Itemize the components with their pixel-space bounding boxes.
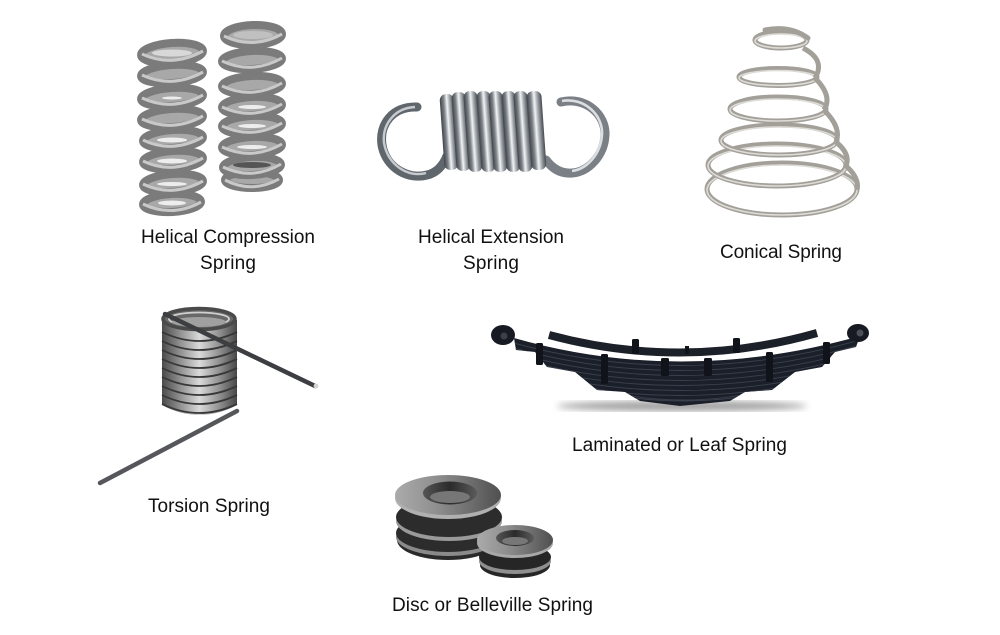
label: helical compression spring bbox=[141, 227, 315, 274]
label: helical extension spring: Helical Extension bbox=[418, 227, 564, 248]
left compression spring bbox=[140, 41, 204, 214]
right hook bbox=[546, 101, 605, 173]
label: helical compression spring: Helical Compression bbox=[141, 227, 315, 248]
label: helical extension spring bbox=[418, 227, 564, 274]
large disc stack bbox=[395, 475, 502, 560]
coil bbox=[162, 320, 237, 415]
label: helical compression spring: Spring bbox=[200, 253, 256, 274]
label: torsion spring: Torsion Spring bbox=[148, 496, 270, 517]
right eye bbox=[847, 324, 869, 342]
leaf layers bbox=[510, 340, 860, 401]
coil 4 bbox=[721, 125, 837, 155]
label: laminated or leaf spring: Laminated or Leaf Spring bbox=[572, 435, 787, 456]
connecting wire bbox=[803, 48, 858, 190]
clamps bbox=[536, 338, 830, 384]
coil 3 bbox=[730, 97, 826, 121]
small disc stack bbox=[477, 525, 553, 578]
right compression spring bbox=[222, 24, 282, 188]
coil 5 bbox=[708, 144, 846, 186]
secondary leaf bbox=[549, 333, 817, 353]
icon: conical spring bbox=[707, 29, 858, 215]
icon: laminated leaf spring bbox=[491, 324, 869, 411]
label: conical spring: Conical Spring bbox=[720, 242, 842, 263]
left hook bbox=[382, 107, 447, 176]
icon: torsion spring bbox=[100, 308, 318, 483]
coil body bbox=[439, 91, 547, 172]
ground shadow bbox=[557, 401, 807, 411]
icon: disc or Belleville springs bbox=[395, 475, 553, 578]
leaf stack bbox=[514, 336, 860, 406]
top coil bbox=[755, 32, 807, 48]
lower arm bbox=[100, 411, 237, 483]
label: disc or Belleville spring: Disc or Belleville Spring bbox=[392, 595, 593, 616]
icon: helical compression springs bbox=[140, 24, 282, 214]
label: helical extension spring: Spring bbox=[463, 253, 519, 274]
icon: helical extension spring bbox=[382, 91, 605, 176]
coil 2 bbox=[739, 68, 817, 86]
bottom coil bbox=[707, 163, 857, 215]
upper arm bbox=[165, 314, 315, 386]
left eye bbox=[491, 325, 515, 345]
